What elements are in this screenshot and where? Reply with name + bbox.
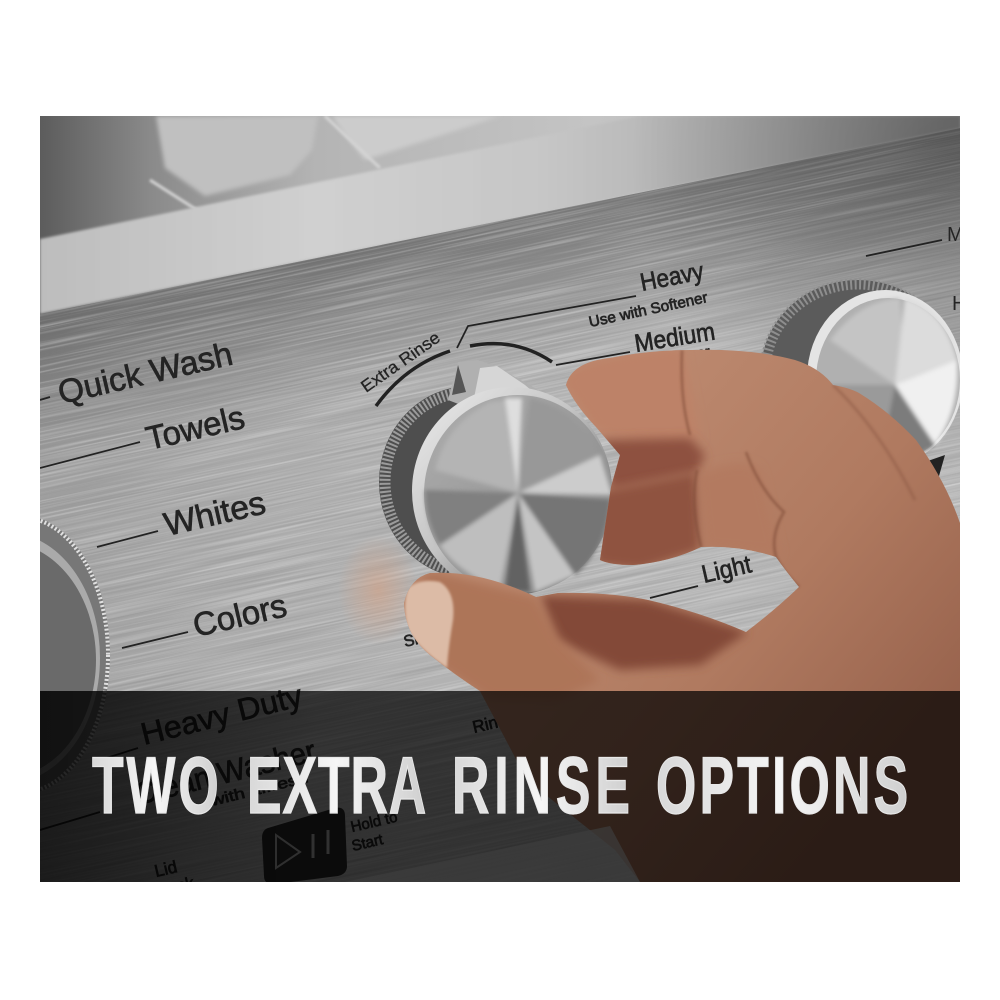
label: Heavy: Heavy bbox=[638, 257, 706, 297]
knob face bbox=[424, 395, 612, 593]
steel panel bbox=[40, 204, 960, 882]
label: with affresh: with affresh bbox=[208, 769, 310, 810]
label: Lock: Lock bbox=[157, 873, 196, 900]
label: M: M bbox=[947, 224, 964, 246]
label: Clean Washer: Clean Washer bbox=[131, 733, 319, 812]
label: Use with Softener: Use with Softener bbox=[587, 289, 709, 331]
start button bbox=[262, 808, 347, 884]
white washer lid strip bbox=[40, 116, 960, 314]
right-side vignette bbox=[678, 116, 960, 446]
dial range arcs bbox=[376, 344, 552, 406]
panel labels bbox=[54, 224, 966, 900]
label: H: H bbox=[952, 293, 966, 315]
label: Lid: Lid bbox=[153, 857, 179, 881]
title: EXTRA bbox=[247, 740, 426, 831]
index fingertip bbox=[560, 348, 700, 441]
leader lines bbox=[40, 240, 942, 830]
center selector knob bbox=[379, 360, 612, 595]
title: OPTIONS bbox=[656, 740, 908, 831]
label: Heavy Duty: Heavy Duty bbox=[137, 678, 306, 752]
finger behind knob upper bbox=[600, 438, 705, 490]
thumbnail bbox=[405, 581, 453, 668]
label: Colors: Colors bbox=[189, 586, 290, 644]
label: Whites: Whites bbox=[160, 484, 269, 543]
label: Start: Start bbox=[350, 831, 386, 855]
label: Quick Wash: Quick Wash bbox=[54, 335, 236, 411]
title bbox=[92, 740, 908, 831]
finger creases bbox=[682, 350, 799, 587]
label: Towels: Towels bbox=[142, 398, 248, 457]
left dial bbox=[40, 518, 110, 790]
hand base bbox=[390, 340, 970, 885]
label: Rinse: Rinse bbox=[471, 709, 517, 737]
label: Softener fragment: Softener bbox=[653, 343, 712, 370]
label: Light: Light bbox=[699, 550, 754, 589]
knob pointer bbox=[448, 360, 538, 404]
label: Single: Single bbox=[402, 624, 449, 651]
dark title band bbox=[40, 691, 960, 882]
hand bbox=[390, 340, 970, 885]
back of hand knuckle bbox=[833, 385, 915, 500]
label: Medium: Medium bbox=[633, 318, 717, 358]
dial base shadow bbox=[930, 455, 945, 476]
middle finger tip bbox=[595, 472, 700, 570]
thumb bbox=[400, 570, 600, 700]
photo: washer control panel bbox=[0, 116, 970, 900]
lower control panel bbox=[262, 808, 640, 884]
glow reflection on panel bbox=[349, 552, 408, 632]
ring finger below knob bbox=[540, 595, 748, 670]
chrome ring bbox=[412, 387, 612, 595]
title: TWO bbox=[92, 740, 219, 831]
label: Extra Rinse: Extra Rinse bbox=[357, 328, 444, 396]
label: Hold to: Hold to bbox=[349, 809, 399, 836]
right dial bbox=[761, 280, 963, 490]
title: RINSE bbox=[452, 740, 630, 831]
lower white lip bbox=[345, 826, 640, 882]
tiled wall background bbox=[40, 116, 960, 316]
brushed texture bbox=[40, 131, 960, 691]
middle finger joint bbox=[697, 464, 780, 555]
